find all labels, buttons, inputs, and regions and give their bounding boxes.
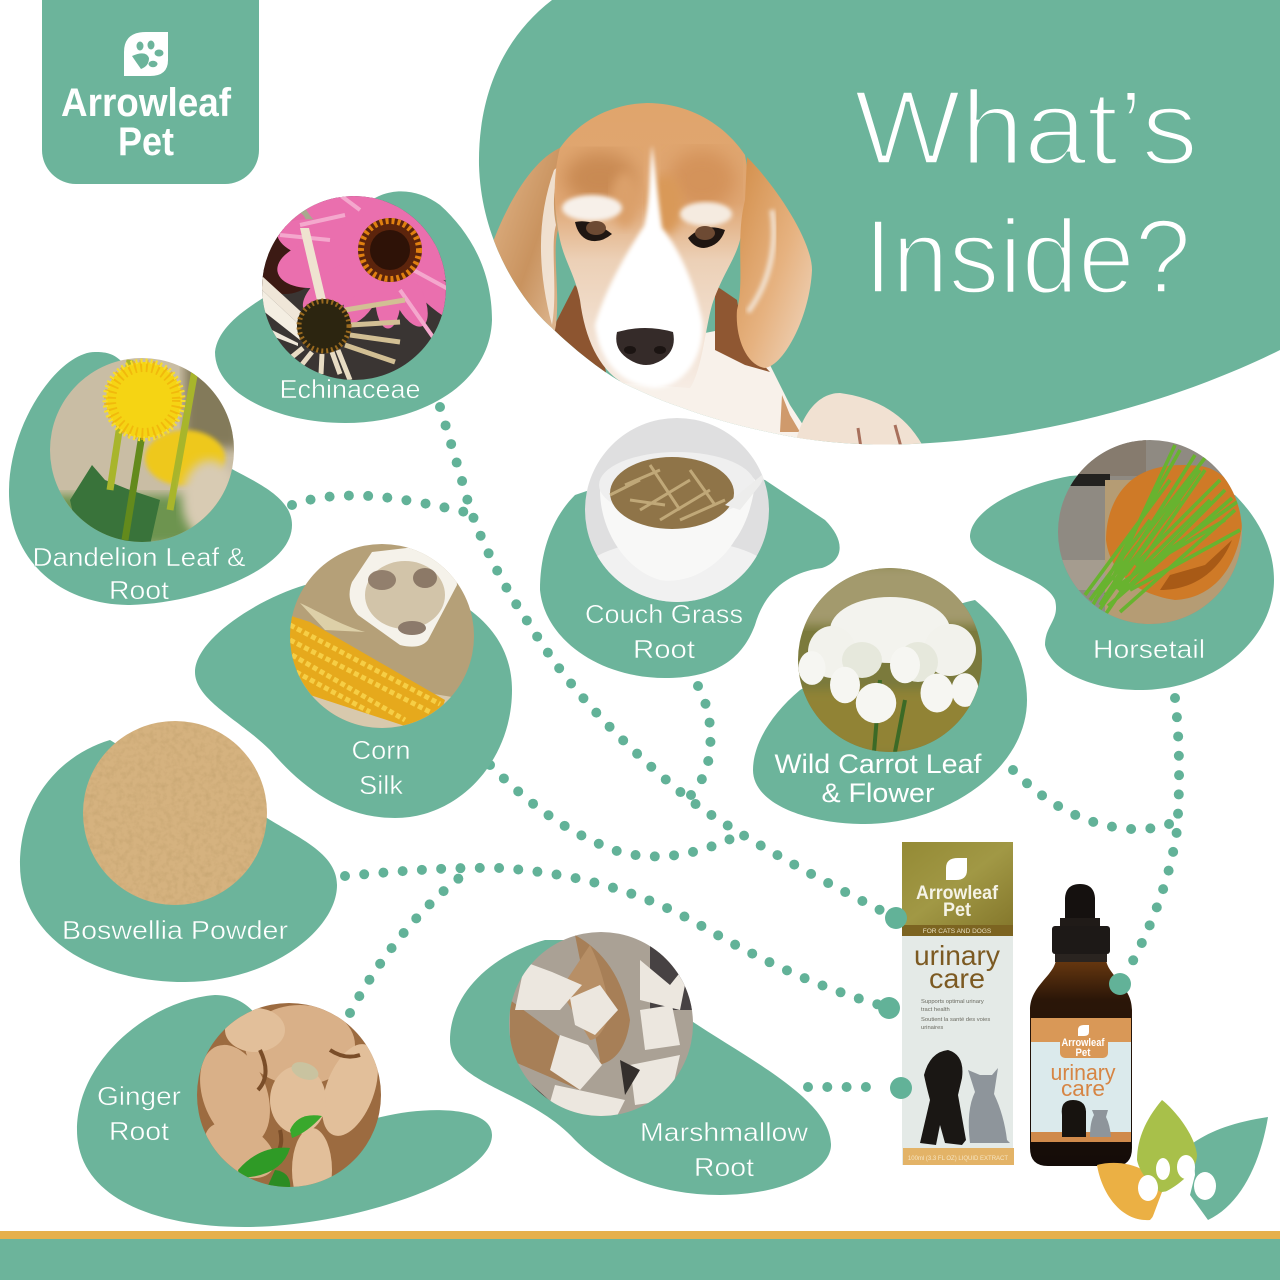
box benefits: urinaires xyxy=(921,1025,943,1031)
label xyxy=(774,749,982,808)
brand logo panel xyxy=(42,0,259,184)
logo wordmark xyxy=(61,81,232,164)
label: Echinaceae xyxy=(280,374,420,404)
box title: care xyxy=(929,963,985,994)
ingredient: Dandelion Leaf & Root xyxy=(9,352,292,605)
logo wordmark: Arrowleaf xyxy=(61,81,232,125)
bottle title xyxy=(1050,1060,1116,1101)
label: Root xyxy=(633,634,696,664)
photo: couch grass in mortar xyxy=(582,415,772,610)
box logo xyxy=(916,858,999,921)
box pets xyxy=(920,1050,1010,1145)
photo: dandelion xyxy=(50,358,240,545)
photo: echinacea flowers xyxy=(262,196,446,380)
box logo: Arrowleaf xyxy=(916,883,999,904)
box benefits: Soutient la santé des voies xyxy=(921,1017,990,1023)
footer band xyxy=(0,1231,1280,1280)
ingredient: Couch Grass Root xyxy=(540,415,840,678)
label: Marshmallow xyxy=(640,1117,808,1147)
box tagline: FOR CATS AND DOGS xyxy=(923,928,992,935)
label: Couch Grass xyxy=(585,599,743,629)
label: Ginger xyxy=(97,1081,181,1111)
photo: horsetail in bowl xyxy=(1056,438,1246,630)
photo: marshmallow root xyxy=(508,932,700,1122)
label xyxy=(585,599,743,664)
dog eyes xyxy=(575,221,725,248)
box volume: 100ml (3.3 FL OZ) LIQUID EXTRACT xyxy=(908,1156,1008,1162)
box benefits xyxy=(921,999,990,1031)
ingredient: Corn Silk xyxy=(195,542,512,818)
label: Horsetail xyxy=(1093,634,1205,664)
photo: ginger xyxy=(197,1003,381,1187)
label: Root xyxy=(109,575,170,605)
paw toes xyxy=(1138,1155,1216,1224)
ingredient: Wild Carrot Leaf & Flower xyxy=(753,565,1027,824)
photo: boswellia powder xyxy=(80,718,270,908)
bottle title: urinary xyxy=(1050,1060,1116,1085)
connector end dots xyxy=(878,907,1131,1099)
logo wordmark: Pet xyxy=(118,120,174,164)
label: Dandelion Leaf & xyxy=(32,542,246,572)
box benefits: Supports optimal urinary xyxy=(921,999,984,1005)
dog paw xyxy=(797,393,922,444)
ingredient: Marshmallow Root xyxy=(450,932,831,1195)
title text: Inside? xyxy=(864,198,1191,316)
ingredient: Echinaceae xyxy=(215,191,492,423)
photo: corn and silk xyxy=(290,544,474,728)
bottle logo: Arrowleaf xyxy=(1062,1037,1105,1049)
icon: brand leaves with paw xyxy=(1097,1100,1268,1224)
dotted connector lines xyxy=(292,407,1179,1087)
title text xyxy=(854,69,1198,316)
label: Root xyxy=(694,1152,755,1182)
beagle photo xyxy=(493,103,925,460)
ingredient: Ginger Root xyxy=(77,995,492,1227)
dog nose xyxy=(616,328,674,365)
label: Root xyxy=(109,1116,170,1146)
label: Wild Carrot Leaf xyxy=(774,749,982,779)
bottle pets xyxy=(1062,1100,1111,1137)
label xyxy=(352,735,410,800)
label xyxy=(97,1081,181,1146)
icon: paw leaf xyxy=(124,32,168,76)
header panel: What's Inside xyxy=(479,0,1280,460)
box title: urinary xyxy=(914,940,1000,971)
product: urinary care box xyxy=(902,842,1014,1165)
box benefits: tract health xyxy=(921,1007,950,1013)
box title xyxy=(914,940,1000,994)
box logo: Pet xyxy=(943,900,972,921)
label: Corn xyxy=(352,735,410,765)
ingredient: Boswellia Powder xyxy=(20,718,337,982)
label xyxy=(32,542,246,605)
bottle logo xyxy=(1060,1020,1108,1059)
title text: What’s xyxy=(854,69,1198,187)
label xyxy=(640,1117,808,1182)
label: & Flower xyxy=(822,778,935,808)
product: urinary care bottle xyxy=(1030,884,1132,1166)
bottle logo: Pet xyxy=(1076,1047,1091,1059)
photo: wild carrot flower xyxy=(795,565,985,755)
ingredient: Horsetail xyxy=(970,438,1274,690)
label: Boswellia Powder xyxy=(62,915,288,945)
label: Silk xyxy=(359,770,404,800)
bottle title: care xyxy=(1061,1076,1105,1101)
